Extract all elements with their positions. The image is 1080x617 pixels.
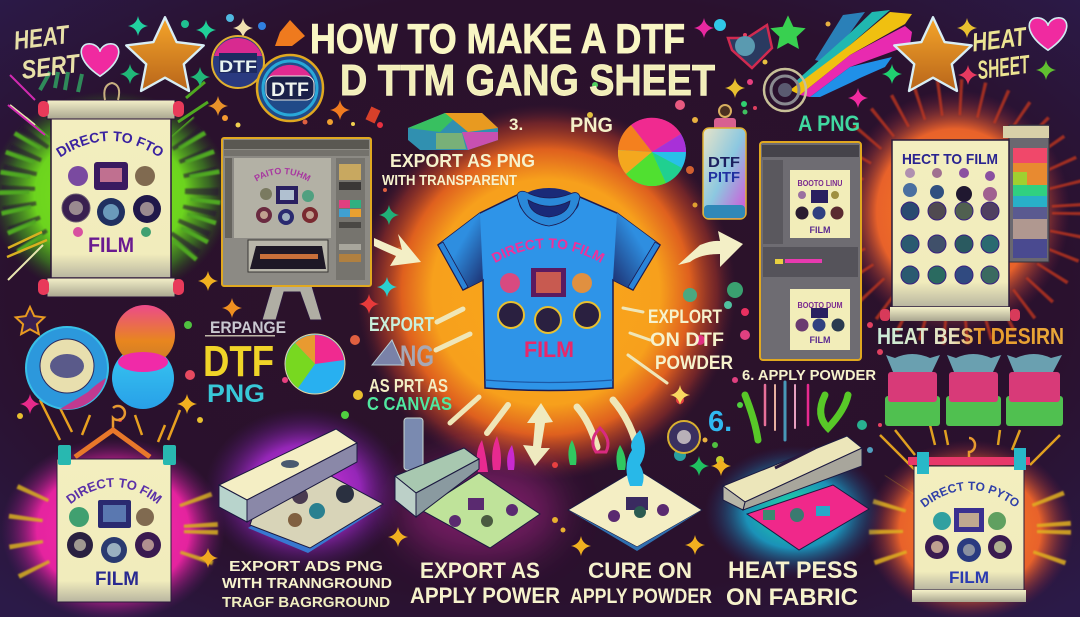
shirt heading: DIRECT TO FILM xyxy=(491,238,605,263)
container 1 xyxy=(885,354,940,426)
text: erpange: ERPANGE xyxy=(210,318,286,337)
t-shirt xyxy=(437,188,661,392)
icon: palette block xyxy=(408,113,498,150)
icon: pie chart xyxy=(285,334,345,394)
icon: shield badge xyxy=(728,25,772,68)
scroll footer word: FILM xyxy=(95,569,139,590)
text: export as png xyxy=(382,151,535,189)
right corner label: SHEET xyxy=(976,49,1032,85)
badge: large DTF xyxy=(257,55,323,121)
panel heading: HECT TO FILM xyxy=(902,151,998,168)
glow: printer purple xyxy=(205,408,405,572)
left corner label: HEAT xyxy=(12,19,72,56)
container 2 xyxy=(946,354,1001,426)
icon: gold star left xyxy=(126,17,204,91)
text: step 6 apply powder: 6. APPLY POWDER xyxy=(742,367,876,384)
arrow: monitor to shirt xyxy=(374,234,421,266)
text: explort on dtf powder xyxy=(648,307,733,374)
scroll heading: DIRECT TO FTO xyxy=(56,131,163,158)
right corner label xyxy=(970,21,1033,85)
text: dtf yellow: DTF xyxy=(203,337,274,386)
text: export as png: WITH TRANSPARENT xyxy=(382,172,517,189)
shirt graphics xyxy=(498,268,600,333)
bottle text: DTF xyxy=(708,154,740,171)
sheet design upper xyxy=(796,179,844,235)
glow: top-left green burst xyxy=(0,71,221,281)
text: png teal: PNG xyxy=(207,380,265,408)
text: explort on dtf powder: ON DTF xyxy=(650,330,724,351)
scroll heading: DIRECT TO FIM xyxy=(66,478,162,504)
text: as prt as canvas: C CANVAS xyxy=(367,394,452,414)
sheet design upper: FILM xyxy=(810,225,830,235)
scroll: direct to film, bottom right xyxy=(908,436,1030,602)
icon: orange gem xyxy=(275,20,305,46)
text: explort on dtf powder: EXPLORT xyxy=(648,307,722,328)
panel: sheet with swatches, top right xyxy=(880,125,1049,321)
icon: rainbow swirl xyxy=(764,10,912,111)
text: export ads png: WITH TRANNGROUND xyxy=(222,575,392,592)
arrow: double vertical xyxy=(523,403,553,466)
title: D TTM GANG SHEET xyxy=(340,56,715,105)
scroll: direct to film, bottom left xyxy=(56,404,176,602)
scroll heading: DIRECT TO PYTO xyxy=(920,482,1019,508)
text: export ads png: TRAGF BAGRGROUND xyxy=(222,594,390,611)
panel badge grid xyxy=(901,168,999,284)
label: green a png: A PNG xyxy=(798,111,860,136)
glow: bottom-left pink burst xyxy=(1,392,225,617)
text: export as apply power xyxy=(410,558,560,608)
scroll: direct to film, top left xyxy=(38,100,184,298)
containers row xyxy=(885,354,1063,426)
flames under shirt xyxy=(477,428,626,472)
title: HOW TO MAKE A DTF xyxy=(310,15,685,62)
badge: small DTF xyxy=(212,36,264,88)
left corner label: SERT xyxy=(20,48,83,85)
glow: bottom-right red burst xyxy=(866,425,1074,617)
brush strokes around the shirt xyxy=(436,308,667,447)
icon: heart right xyxy=(1029,18,1067,50)
label: number 6: 6. xyxy=(708,406,732,438)
sheet design lower: BOOTO DUM xyxy=(798,301,843,310)
right corner label: HEAT xyxy=(970,21,1029,57)
text: export as apply power: EXPORT AS xyxy=(420,558,540,583)
arrow: shirt to monitor xyxy=(678,231,743,267)
glow: top-right orange burst xyxy=(840,90,1070,334)
scroll footer word: FILM xyxy=(949,568,989,587)
monitor canvas text: PAITO TUHM xyxy=(254,168,311,182)
confetti xyxy=(17,14,883,532)
icon: stacked balls xyxy=(112,305,175,409)
badge: small DTF: DTF xyxy=(219,57,257,76)
text: as prt as canvas: AS PRT AS xyxy=(369,376,448,396)
sheet design upper: BOOTO LINU xyxy=(798,179,843,188)
text: heat pess on fabric xyxy=(726,557,858,611)
shirt footer word: FILM xyxy=(524,337,574,362)
icon: small star outline xyxy=(16,307,44,334)
icon: gold star right xyxy=(894,17,972,91)
glow: sheet pink xyxy=(400,460,560,560)
printer: apply powder step xyxy=(395,418,540,548)
scroll badges xyxy=(62,162,161,237)
badge: large DTF: DTF xyxy=(271,80,309,101)
text: adg graphic xyxy=(372,340,434,373)
printer: export step xyxy=(219,429,383,553)
scroll badges xyxy=(925,508,1012,562)
text: as prt as canvas xyxy=(367,376,452,414)
glow: press teal xyxy=(705,446,885,578)
text: cure on apply powder xyxy=(570,558,712,608)
icon: swirl coin xyxy=(668,421,700,453)
icon: dtf bottle: PITF xyxy=(708,169,740,186)
text: adg graphic: NG xyxy=(400,340,434,373)
label: png: PNG xyxy=(570,114,613,137)
scroll footer word: FILM xyxy=(88,234,134,257)
monitor: design software xyxy=(221,137,372,320)
monitor: gang sheet software xyxy=(760,142,861,360)
text: export as png: EXPORT AS PNG xyxy=(390,151,535,171)
text: export ads png xyxy=(222,558,392,611)
icon: disc xyxy=(26,327,108,409)
glow: central orange burst xyxy=(356,104,736,480)
left corner label xyxy=(12,18,83,85)
icon: dtf bottle xyxy=(703,105,746,219)
text: export ads png: EXPORT ADS PNG xyxy=(229,558,383,575)
sheet design lower xyxy=(796,301,844,345)
text: cure on apply powder: CURE ON xyxy=(588,558,692,583)
text: cure on apply powder: APPLY POWDER xyxy=(570,585,712,608)
icon: heart left xyxy=(81,44,119,76)
steam: heat press xyxy=(745,382,848,440)
text: heat pess on fabric: HEAT PESS xyxy=(728,557,858,584)
text: export as apply power: APPLY POWER xyxy=(410,583,560,608)
container 3 xyxy=(1006,354,1063,426)
label: step 3: 3. xyxy=(509,115,523,134)
title xyxy=(310,15,715,105)
scroll badges xyxy=(67,500,161,563)
icon: green star xyxy=(770,15,806,49)
text: export: EXPORT xyxy=(369,314,434,336)
heat press xyxy=(723,436,869,550)
sheet design lower: FILM xyxy=(810,335,830,345)
text: explort on dtf powder: POWDER xyxy=(655,353,733,374)
icon: colour wheel xyxy=(618,118,686,186)
icon: hanger clip top left xyxy=(104,83,119,100)
text: heat pess on fabric: ON FABRIC xyxy=(726,584,858,611)
sheet: cure step xyxy=(568,430,702,551)
